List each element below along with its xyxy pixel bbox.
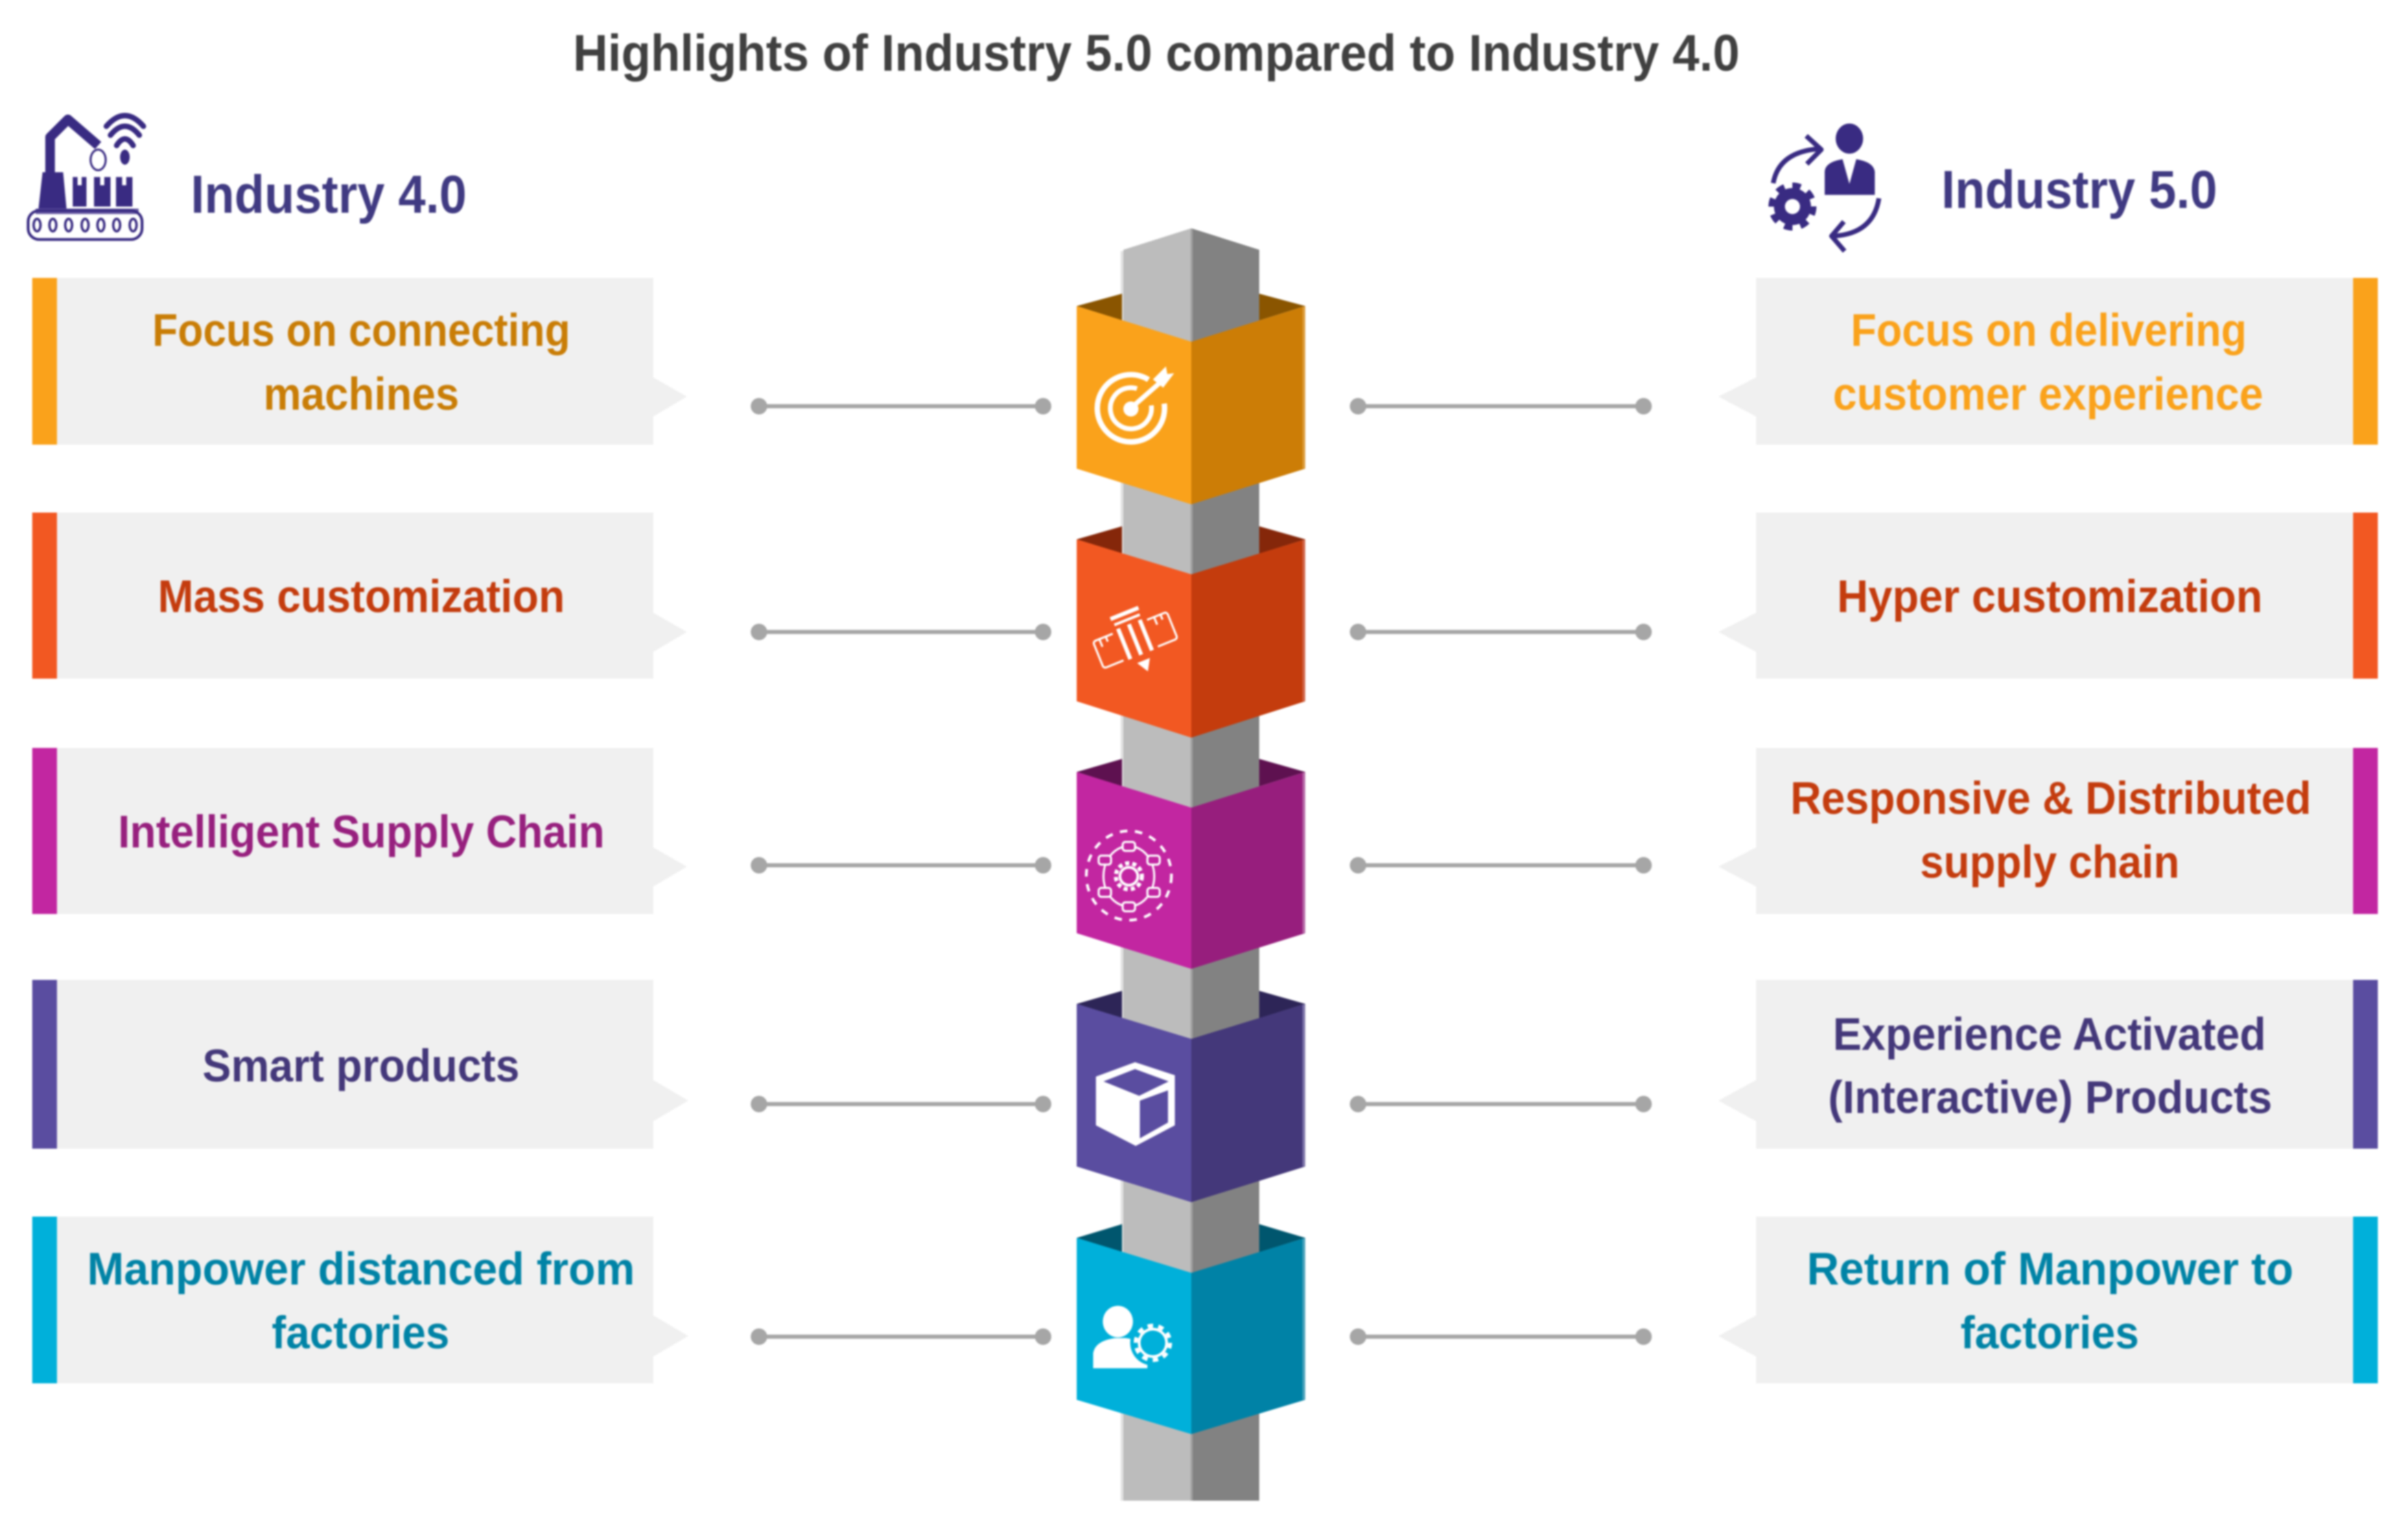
label: Mass customization	[158, 571, 565, 622]
icon: network gear	[1086, 831, 1171, 920]
panel: left 3 intelligent supply chain	[32, 748, 687, 914]
icon: person, gear and cycle arrows	[1772, 124, 1879, 251]
accent bar	[32, 1217, 57, 1383]
label	[152, 305, 570, 420]
label	[1790, 773, 2311, 888]
accent bar	[32, 278, 57, 445]
icon: target with arrow	[1093, 366, 1174, 446]
label: Focus on delivering	[1851, 305, 2247, 356]
panel: right 4 experience activated products	[1718, 980, 2378, 1149]
cube 3: supply network	[1077, 759, 1305, 969]
panel: left 5 manpower distanced	[32, 1217, 688, 1383]
label: Return of Manpower to	[1807, 1243, 2293, 1295]
panel: right 2 hyper customization	[1718, 513, 2378, 679]
label: Focus on connecting	[152, 305, 570, 356]
connectors: right	[1350, 398, 1652, 1345]
accent bar	[2353, 1217, 2378, 1383]
pillar	[1121, 228, 1259, 1501]
icon: ruler and pencil	[1087, 596, 1185, 686]
panel: right 5 return of manpower	[1718, 1217, 2378, 1383]
panel: left 2 mass customization	[32, 513, 687, 679]
panel: right 3 responsive and distributed supply chain	[1718, 748, 2378, 914]
heading: Industry 4.0: Industry 4.0	[191, 164, 467, 224]
label: Manpower distanced from	[87, 1243, 635, 1295]
label: factories	[272, 1307, 449, 1359]
panel: left 1 focus on connecting machines	[32, 278, 687, 445]
label: Experience Activated	[1833, 1009, 2266, 1060]
label	[1807, 1243, 2293, 1359]
accent bar	[2353, 748, 2378, 914]
label	[1828, 1009, 2272, 1123]
accent bar	[32, 748, 57, 914]
accent bar	[32, 513, 57, 679]
cube 4: box	[1077, 991, 1305, 1202]
cube 5: person and gear	[1077, 1224, 1305, 1434]
label: supply chain	[1920, 836, 2179, 888]
connectors: left	[751, 398, 1051, 1345]
label: factories	[1961, 1307, 2139, 1359]
label: Hyper customization	[1837, 571, 2263, 622]
heading: Industry 5.0: Industry 5.0	[1941, 159, 2217, 220]
panel: right 1 focus on delivering customer experience	[1718, 278, 2378, 445]
icon: robot arm and conveyor	[28, 115, 143, 239]
icon: cube box	[1096, 1062, 1175, 1146]
accent bar	[2353, 513, 2378, 679]
accent bar	[2353, 980, 2378, 1149]
accent bar	[2353, 278, 2378, 445]
label	[1833, 305, 2263, 420]
label: Smart products	[202, 1040, 519, 1092]
cube 1: target	[1077, 294, 1305, 504]
label: Intelligent Supply Chain	[118, 806, 605, 858]
label: (Interactive) Products	[1828, 1072, 2272, 1123]
cube 2: ruler and pencil	[1077, 526, 1305, 738]
panel: left 4 smart products	[32, 980, 688, 1149]
icon: person with gear	[1093, 1306, 1176, 1368]
label: machines	[264, 368, 459, 420]
title: Highlights of Industry 5.0 compared to Industry 4.0	[573, 24, 1740, 82]
label: customer experience	[1833, 368, 2263, 420]
label	[87, 1243, 635, 1359]
label: Responsive & Distributed	[1790, 773, 2311, 824]
accent bar	[32, 980, 57, 1149]
